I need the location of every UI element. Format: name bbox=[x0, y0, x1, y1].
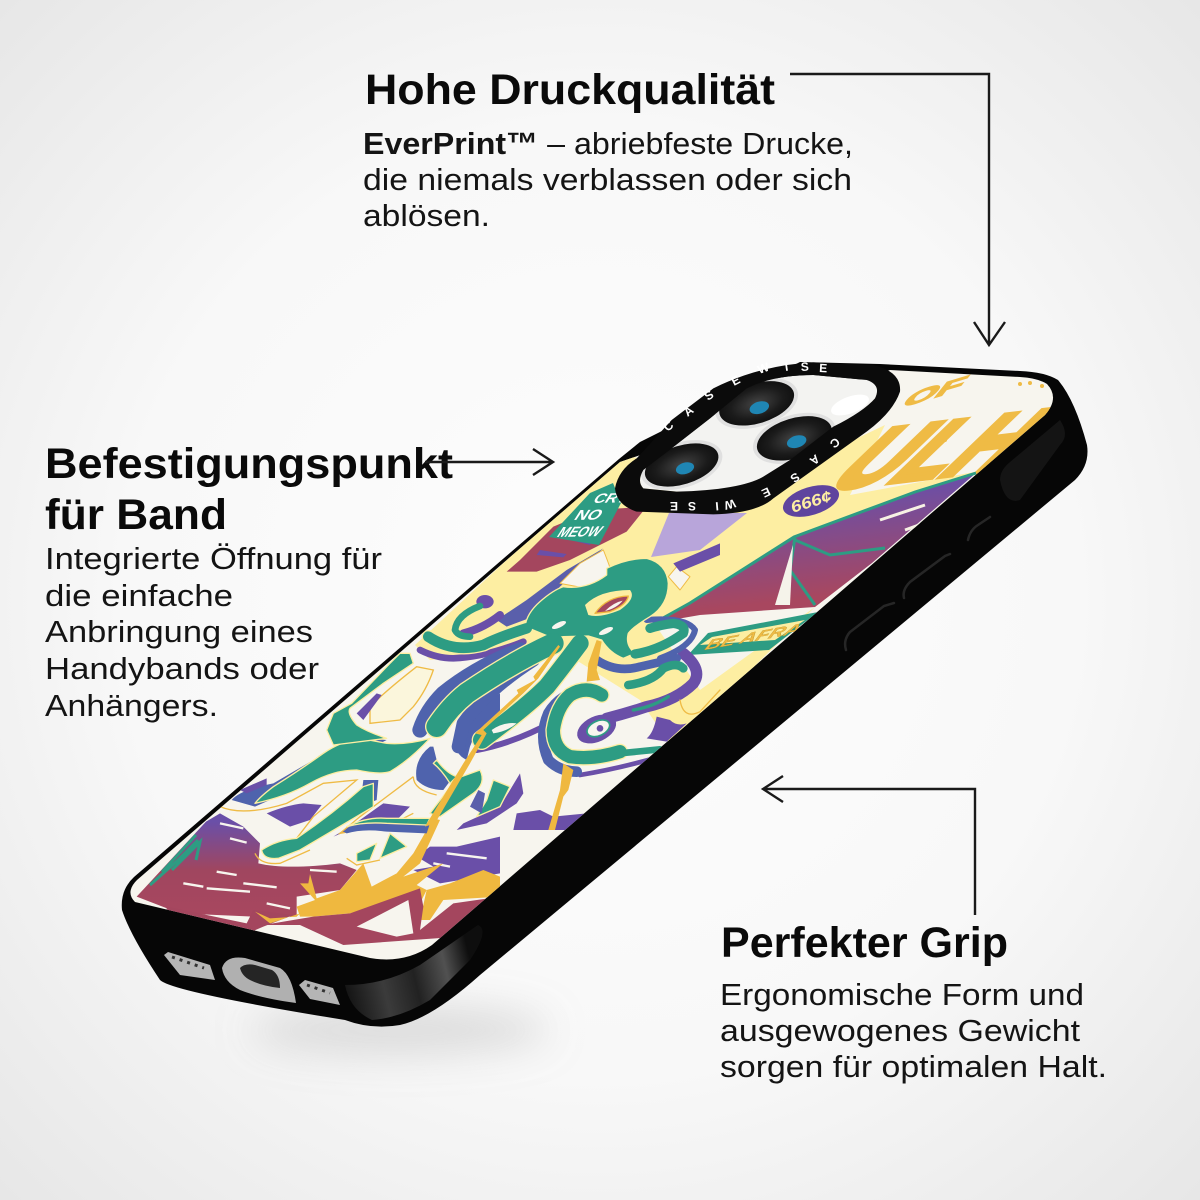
lower purple ground bbox=[513, 810, 587, 830]
green tentacles bbox=[428, 606, 684, 758]
purple tentacle shadows bbox=[420, 615, 697, 775]
blue shadow strips bbox=[232, 693, 500, 833]
yellow outline of tentacles bbox=[428, 628, 620, 758]
maroon sun arc bbox=[507, 507, 647, 572]
art base bbox=[130, 370, 1054, 960]
purple price badge: 666¢ bbox=[789, 488, 834, 517]
body text: die einfache bbox=[45, 578, 233, 613]
arrow: to case side bbox=[763, 776, 975, 915]
callout: strap attachment bbox=[45, 440, 453, 723]
ring lettering top: CASEWISE bbox=[661, 360, 828, 434]
octopus nostrils bbox=[551, 619, 614, 637]
orange burst bbox=[255, 818, 500, 923]
body text: Handybands oder bbox=[45, 651, 319, 686]
heading: Hohe Druckqualität bbox=[365, 66, 775, 114]
purple tail column and fur bbox=[457, 773, 523, 830]
heading: Befestigungspunkt bbox=[45, 440, 453, 488]
right ear bbox=[668, 543, 720, 590]
maroon lower details bbox=[166, 908, 290, 930]
creature traced from crop bbox=[420, 543, 720, 830]
halftone lilac rays bbox=[651, 513, 747, 557]
body text: Integrierte Öffnung für bbox=[45, 541, 382, 576]
small green spire detail bbox=[150, 835, 200, 885]
glossy corner of case bbox=[345, 925, 482, 1020]
be afraid sign: BE AFRAI bbox=[702, 619, 811, 653]
heading bbox=[45, 440, 453, 539]
lens left bbox=[635, 431, 728, 499]
maroon ground mass bbox=[137, 813, 357, 917]
orange outlines bbox=[220, 777, 437, 865]
body text: die niemals verblassen oder sich bbox=[363, 162, 852, 197]
camera window bbox=[640, 375, 877, 492]
white blob accent bbox=[492, 723, 517, 733]
body text bbox=[45, 541, 382, 723]
white streaks in the ground bbox=[183, 823, 487, 908]
sign underline stripes bbox=[536, 540, 590, 558]
title lettering OF: OF bbox=[896, 371, 974, 413]
ring lettering bottom: CASEWISE bbox=[670, 435, 843, 513]
cream pocket bbox=[370, 667, 433, 723]
body text: Anbringung eines bbox=[45, 614, 313, 649]
bat wing bbox=[654, 473, 976, 623]
be afraid sign bbox=[688, 612, 818, 655]
callout: print quality bbox=[363, 66, 853, 233]
body text: EverPrint™ – abriebfeste Drucke, bbox=[363, 126, 853, 161]
blue tentacle shadows bbox=[420, 619, 695, 772]
window shine bbox=[828, 390, 872, 420]
lower scene: ground, burst, legs bbox=[137, 653, 500, 945]
green sign: no meow bbox=[549, 483, 621, 545]
arrow: to top of case bbox=[790, 74, 1005, 345]
lens top bbox=[709, 369, 804, 438]
body text bbox=[720, 977, 1107, 1084]
printed artwork bbox=[130, 370, 1054, 960]
orange lightning bolts bbox=[425, 640, 602, 830]
green sign: no meow: CRY bbox=[590, 491, 633, 506]
purple streaks bbox=[267, 803, 500, 883]
orange paint specks bbox=[943, 381, 1044, 442]
body text: Ergonomische Form und bbox=[720, 977, 1084, 1012]
green sign: no meow: MEOW bbox=[554, 523, 607, 540]
body text: Anhängers. bbox=[45, 688, 218, 723]
left limbs in green bbox=[255, 653, 482, 862]
charging port bbox=[222, 957, 296, 1003]
sky top-left details traced from crop bbox=[507, 507, 647, 572]
maroon mountain with white peak bbox=[263, 888, 500, 945]
left speaker grille bbox=[164, 952, 215, 980]
case body bbox=[122, 362, 1088, 1027]
camera ring bbox=[615, 362, 900, 514]
body text: ablösen. bbox=[363, 198, 490, 233]
pale yellow sky bbox=[415, 425, 985, 747]
lens right bbox=[747, 404, 842, 473]
tentacle eye swirl bbox=[573, 709, 621, 749]
side buttons bbox=[845, 420, 1065, 650]
green sign: no meow: NO bbox=[571, 507, 607, 523]
small purple details bbox=[240, 693, 382, 793]
cream ear left bbox=[560, 550, 612, 588]
purple price badge bbox=[783, 485, 839, 517]
camera bump bbox=[615, 360, 900, 514]
octopus eye bbox=[585, 590, 632, 616]
phone case bbox=[100, 350, 1100, 1027]
purple blob and eye-top ellipse bbox=[476, 595, 687, 742]
yellow halo tentacle ring bbox=[680, 690, 720, 714]
body text bbox=[363, 126, 853, 233]
body text: sorgen für optimalen Halt. bbox=[720, 1049, 1107, 1084]
body text: ausgewogenes Gewicht bbox=[720, 1013, 1080, 1048]
heading: für Band bbox=[45, 491, 227, 539]
right speaker grille bbox=[299, 980, 340, 1005]
arrow: to camera ring bbox=[425, 449, 553, 475]
heading: Perfekter Grip bbox=[721, 919, 1008, 967]
blue and purple head shadow bbox=[497, 548, 603, 627]
callout: perfect grip bbox=[720, 919, 1107, 1084]
title lettering ULH: ULH bbox=[804, 391, 1078, 509]
head bbox=[525, 558, 668, 658]
phone drop shadow bbox=[250, 1006, 550, 1054]
